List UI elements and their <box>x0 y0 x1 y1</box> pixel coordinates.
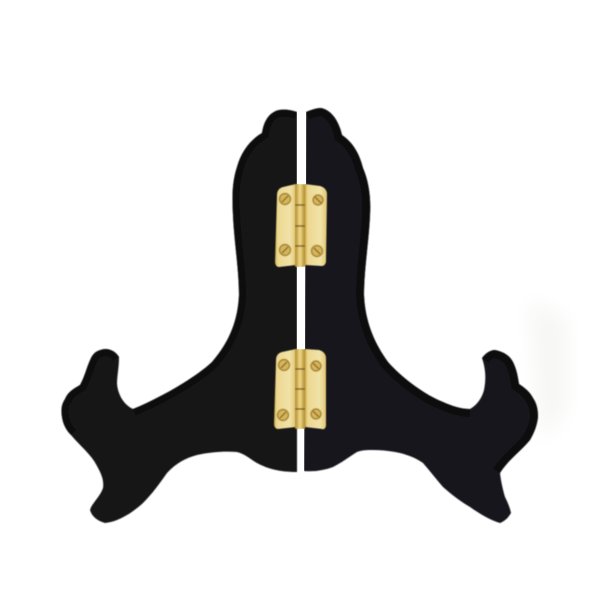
lower hinge barrel <box>295 349 305 429</box>
upper hinge knuckle lines <box>295 205 305 246</box>
upper hinge barrel <box>295 184 305 267</box>
lower hinge knuckle lines <box>295 369 305 409</box>
upper brass hinge <box>275 184 327 267</box>
right wing bevel <box>306 108 538 473</box>
lower hinge screw slots <box>280 362 319 418</box>
lower hinge right leaf <box>305 349 326 429</box>
right wing of stand <box>304 108 538 523</box>
lower brass hinge <box>274 349 326 429</box>
faint shadow at right <box>530 300 566 440</box>
upper hinge screws <box>280 194 323 256</box>
left wing of stand <box>61 110 297 523</box>
upper hinge left leaf <box>275 184 296 267</box>
lower hinge left leaf <box>274 349 296 429</box>
left wing bevel <box>61 110 297 435</box>
upper hinge right leaf <box>305 184 327 266</box>
centre gap <box>297 108 306 474</box>
lower hinge screws <box>278 360 321 420</box>
left wing face <box>61 110 297 523</box>
right wing face <box>304 108 538 523</box>
illustration: hinged plate stand <box>60 107 559 524</box>
upper hinge screw slots <box>282 196 321 254</box>
